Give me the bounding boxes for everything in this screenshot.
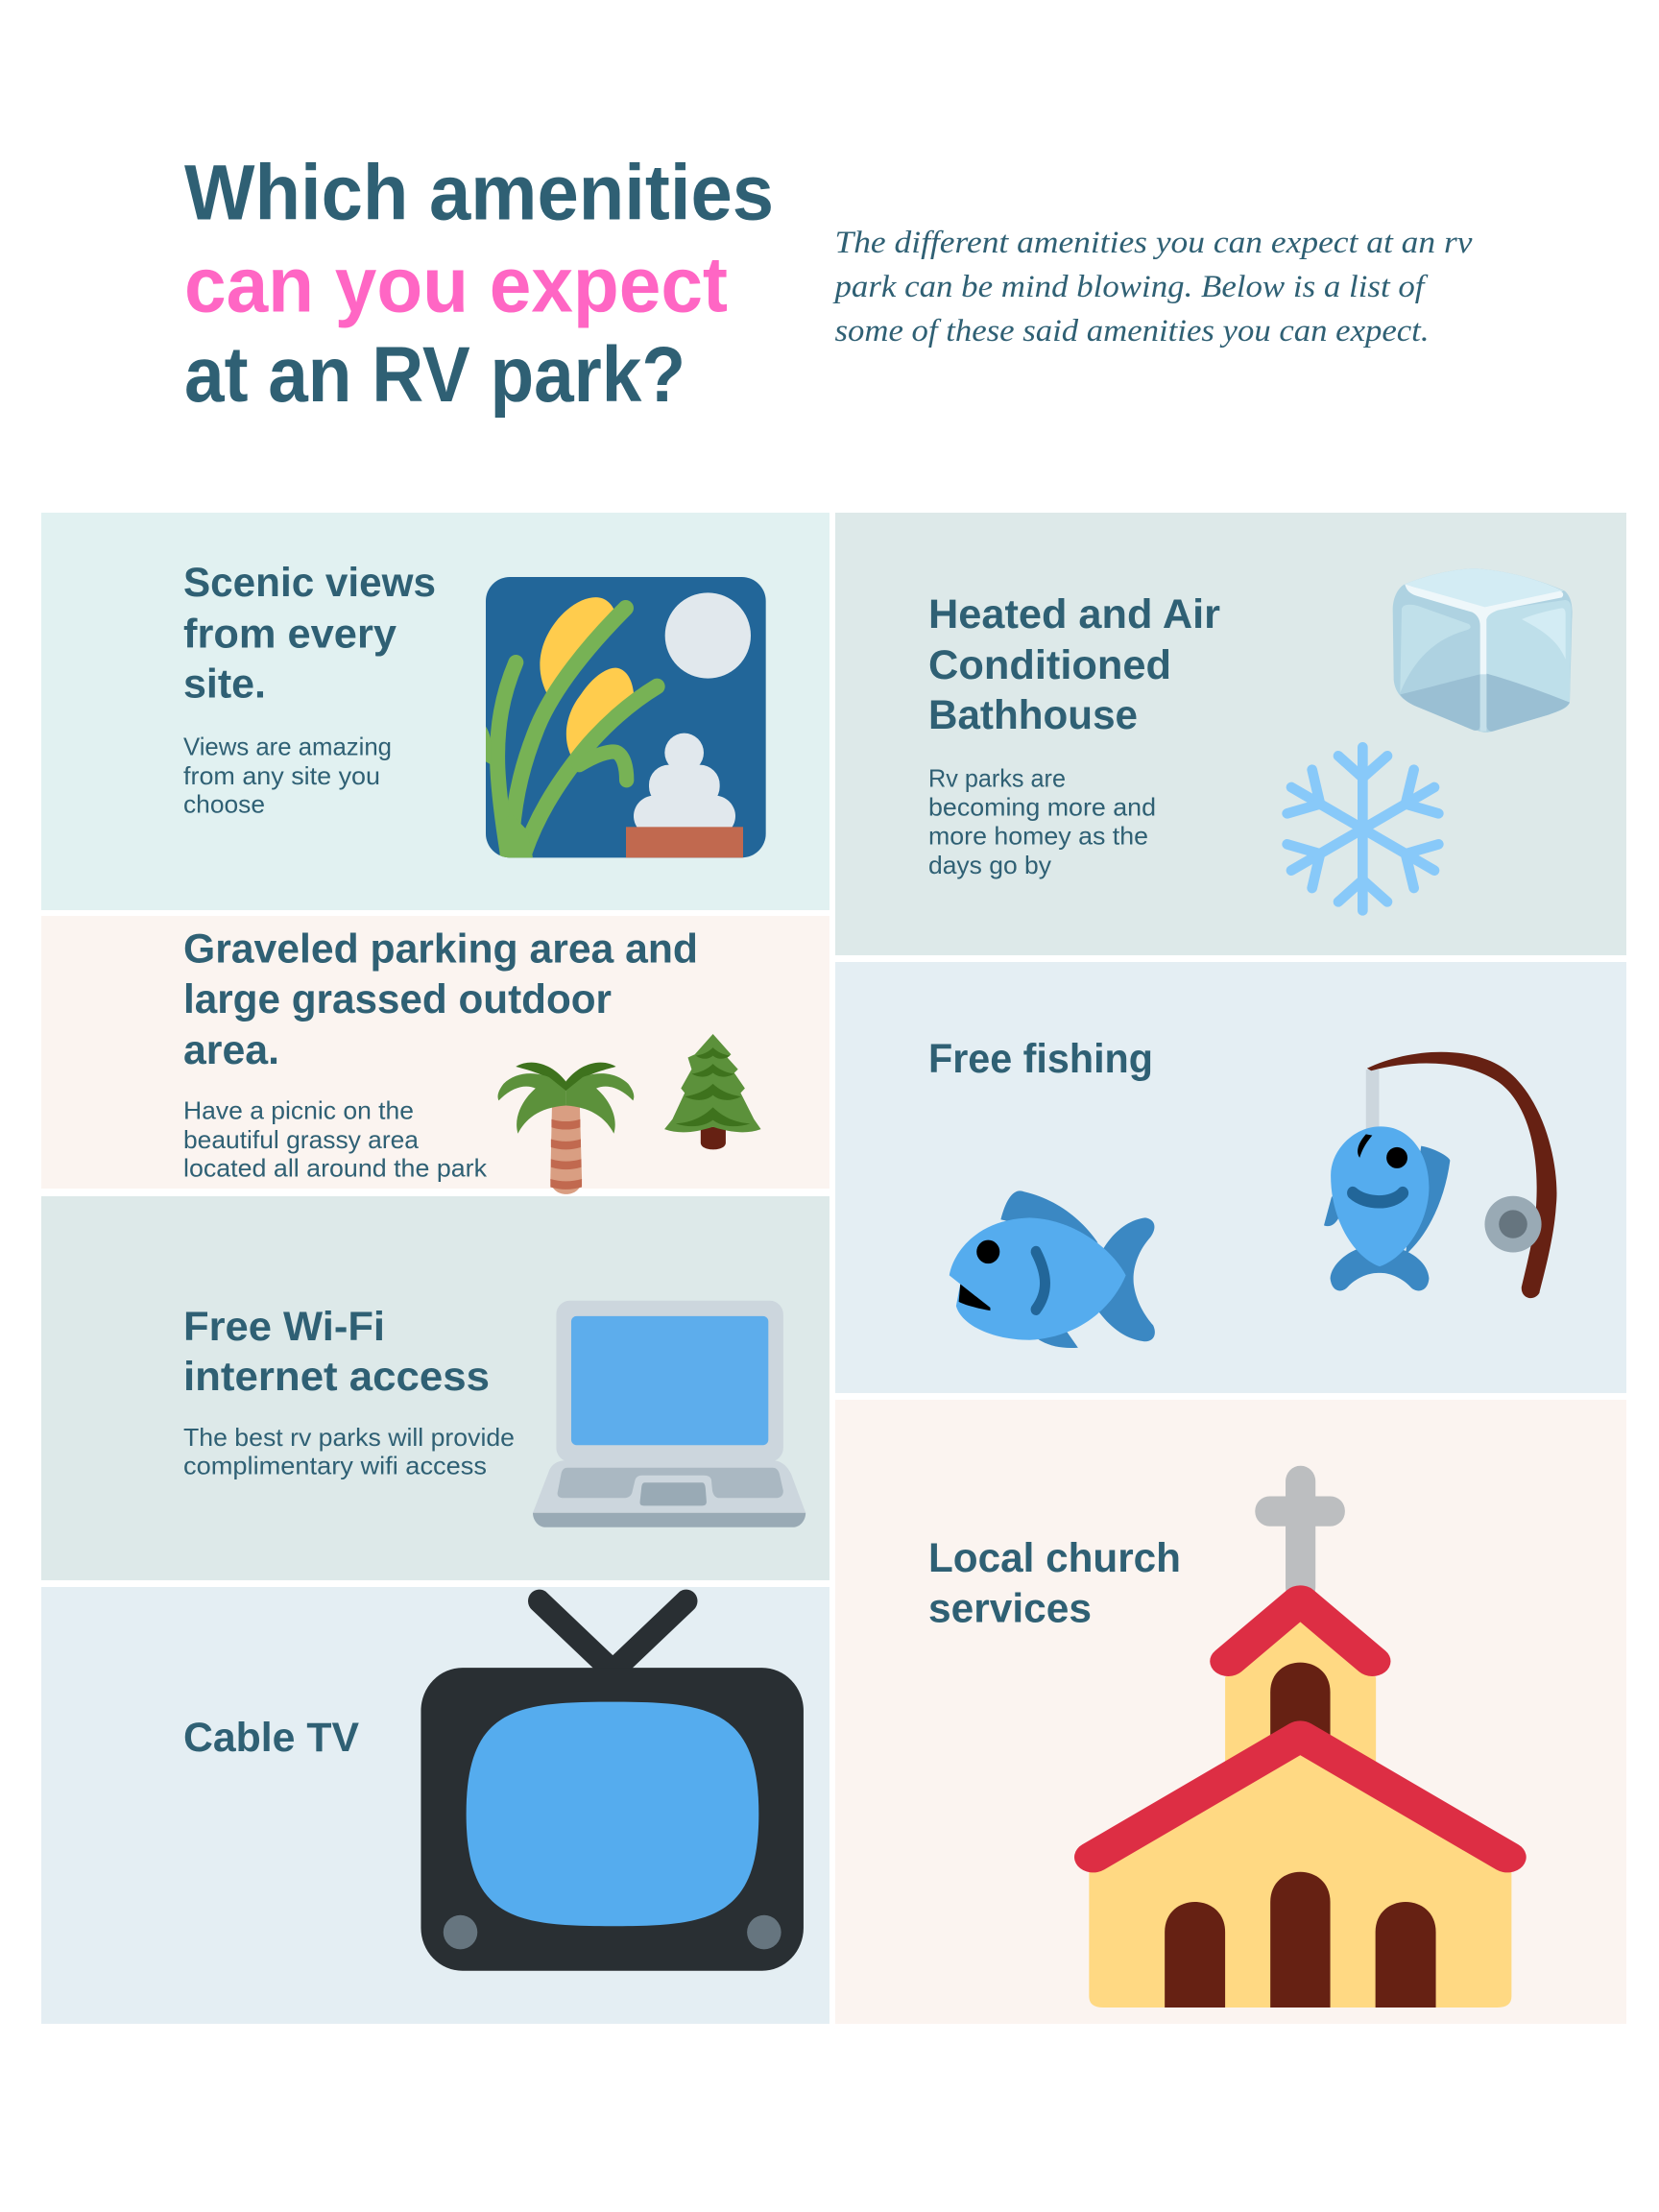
body text: scenic views: Views are amazing <box>183 732 392 760</box>
body text: bathhouse: more homey as the <box>928 822 1148 851</box>
panel: local church <box>835 1400 1626 2024</box>
icon: ice cube <box>1393 568 1573 733</box>
title: Which amenities <box>184 150 774 236</box>
heading: scenic views: site. <box>183 661 266 707</box>
title <box>184 150 774 419</box>
intro text: park can be mind blowing. Below is a list of <box>832 270 1429 304</box>
body text: bathhouse <box>928 764 1156 879</box>
heading: cable tv: Cable TV <box>183 1715 359 1761</box>
body text: scenic views <box>183 732 392 818</box>
body text: free wi-fi <box>183 1423 515 1480</box>
panel: free fishing <box>835 962 1626 1393</box>
heading: graveled parking: area. <box>183 1027 279 1073</box>
title: at an RV park? <box>184 331 685 419</box>
heading: scenic views: Scenic views <box>183 560 436 606</box>
body text: graveled parking <box>183 1096 488 1183</box>
intro text: some of these said amenities you can expect. <box>835 314 1429 349</box>
icon: church <box>1089 1466 1511 2008</box>
heading: graveled parking <box>183 926 698 1073</box>
heading: free wi-fi: internet access <box>183 1354 490 1400</box>
title: can you expect <box>184 242 728 328</box>
panel: graveled parking <box>41 916 830 1194</box>
icon: moon viewing scene <box>486 577 766 861</box>
body text: bathhouse: Rv parks are <box>928 764 1066 793</box>
body text: graveled parking: beautiful grassy area <box>183 1125 420 1154</box>
icon: snowflake <box>1287 747 1438 910</box>
heading: bathhouse: Heated and Air <box>928 591 1220 637</box>
heading: scenic views: from every <box>183 611 397 657</box>
body text: bathhouse: becoming more and <box>928 793 1156 822</box>
body text: bathhouse: days go by <box>928 851 1051 879</box>
heading: bathhouse <box>928 591 1220 738</box>
heading: bathhouse: Conditioned <box>928 642 1171 688</box>
icon: palm tree <box>498 1063 634 1194</box>
body text: graveled parking: Have a picnic on the <box>183 1096 414 1125</box>
body text: scenic views: choose <box>183 789 265 818</box>
heading: graveled parking: large grassed outdoor <box>183 976 612 1022</box>
body text: free wi-fi: complimentary wifi access <box>183 1452 487 1480</box>
icon: fish <box>950 1190 1155 1348</box>
heading: scenic views <box>183 560 436 707</box>
heading: local church <box>928 1535 1181 1632</box>
panel: scenic views <box>41 513 830 910</box>
panel: bathhouse <box>835 513 1626 955</box>
heading: free wi-fi <box>183 1304 490 1400</box>
heading: bathhouse: Bathhouse <box>928 692 1138 738</box>
icon: evergreen tree <box>664 1034 761 1149</box>
icon: fishing rod with hooked fish <box>1324 1052 1556 1298</box>
intro text: The different amenities you can expect at an rv <box>835 226 1473 260</box>
intro text <box>832 226 1473 349</box>
heading: local church: services <box>928 1586 1092 1632</box>
body text: free wi-fi: The best rv parks will provide <box>183 1423 515 1452</box>
body text: graveled parking: located all around the park <box>183 1154 488 1183</box>
panel: free wi-fi <box>41 1196 830 1580</box>
heading: local church: Local church <box>928 1535 1181 1581</box>
panel: cable tv <box>41 1587 830 2024</box>
icon: television <box>421 1601 804 1971</box>
icon: laptop <box>533 1301 805 1527</box>
heading: free fishing: Free fishing <box>928 1036 1153 1082</box>
heading: graveled parking: Graveled parking area and <box>183 926 698 972</box>
body text: scenic views: from any site you <box>183 761 380 790</box>
heading: free wi-fi: Free Wi-Fi <box>183 1304 385 1350</box>
